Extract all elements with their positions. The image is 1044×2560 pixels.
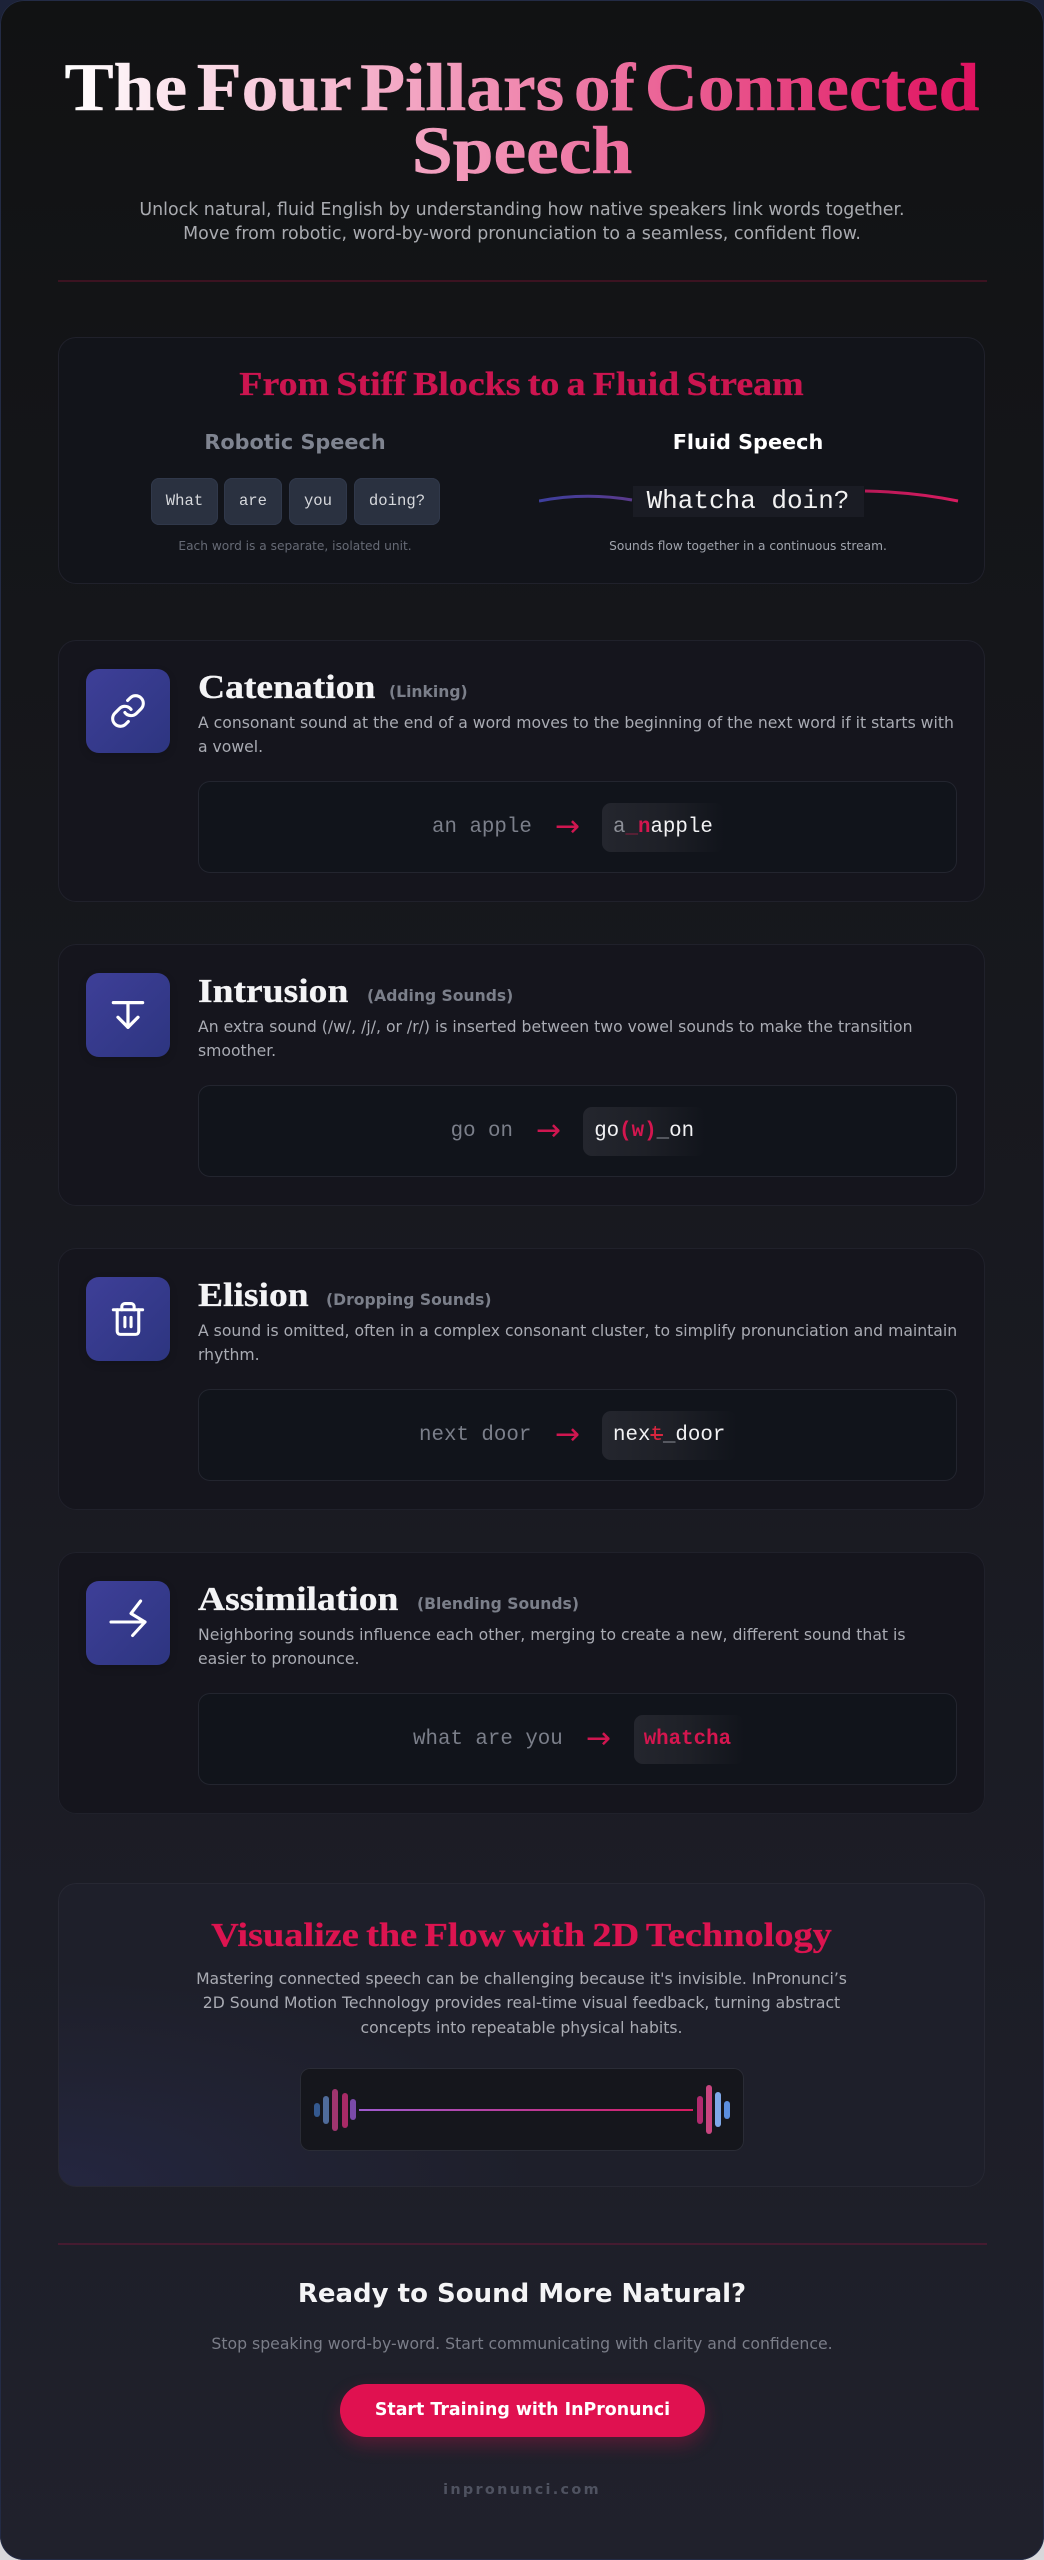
linked result: a_napple (613, 816, 713, 839)
original phrase: go on (451, 1120, 513, 1143)
example: what are you to whatcha (198, 1693, 957, 1785)
heading: fluid speech: Fluid Speech (673, 430, 823, 454)
card: catenation (58, 640, 985, 902)
arrow: → (555, 1417, 580, 1452)
description (198, 712, 954, 756)
description: smoother. (198, 1041, 276, 1060)
assimilation result: whatcha (644, 1728, 731, 1751)
heading: assimilation: Assimilation (198, 1581, 398, 1618)
word block: you: you (304, 492, 332, 510)
panel text: concepts into repeatable physical habits. (361, 2018, 682, 2037)
elision result (602, 1411, 737, 1460)
intrusion result: go(w)_on (594, 1120, 694, 1143)
connecting flow line (359, 2109, 693, 2111)
panel text: Mastering connected speech can be challenging because it's invisible. InPronunci’s (196, 1969, 847, 1988)
assimilation result (634, 1715, 744, 1764)
call to action text: Stop speaking word-by-word. Start communicating with clarity and confidence. (211, 2334, 833, 2353)
description (198, 1320, 957, 1364)
heading: elision: Elision (198, 1277, 309, 1314)
description: easier to pronounce. (198, 1649, 360, 1668)
panel heading: Visualize the Flow with 2D Technology (211, 1917, 832, 1954)
description (198, 1016, 913, 1060)
word block: are (224, 478, 282, 525)
description (198, 1624, 906, 1668)
panel text: 2D Sound Motion Technology provides real-time visual feedback, turning abstract (203, 1993, 840, 2012)
caption: robotic: Each word is a separate, isolated unit. (178, 539, 412, 553)
card: assimilation (58, 1552, 985, 1814)
subtitle (139, 200, 905, 244)
arrow: → (586, 1721, 611, 1756)
description: A sound is omitted, often in a complex consonant cluster, to simplify pronunciation and maintain (198, 1320, 957, 1340)
intrusion result (583, 1107, 705, 1156)
example: an apple to a_napple (198, 781, 957, 873)
title: Speech (412, 112, 632, 188)
title (1, 56, 1043, 181)
example: go on to go(w)_on (198, 1085, 957, 1177)
panel: 2D technology (58, 1883, 985, 2187)
icon: blended arrow (86, 1581, 170, 1665)
panel text (196, 1969, 847, 2037)
website: inpronunci.com (443, 2482, 601, 2498)
tag: dropping sounds: (Dropping Sounds) (326, 1291, 492, 1309)
tag: adding sounds: (Adding Sounds) (367, 987, 513, 1005)
elision result: next_door (613, 1424, 725, 1447)
icon: link (86, 669, 170, 753)
original phrase: what are you (413, 1728, 563, 1751)
panel heading: From Stiff Blocks to a Fluid Stream (239, 366, 804, 403)
arrow: → (555, 809, 580, 844)
panel: stiff blocks to fluid stream (58, 337, 985, 584)
description: a vowel. (198, 737, 263, 756)
word block: are: are (239, 492, 267, 510)
original phrase: an apple (432, 816, 532, 839)
original phrase: next door (419, 1424, 531, 1447)
description: Neighboring sounds influence each other, merging to create a new, different sound that is (198, 1624, 906, 1644)
description: A consonant sound at the end of a word moves to the beginning of the next word if it starts with (198, 712, 954, 732)
title: The Four Pillars of Connected (65, 49, 979, 125)
waveform bars: left (314, 2089, 356, 2131)
description: An extra sound (/w/, /j/, or /r/) is inserted between two vowel sounds to make the transition (198, 1016, 913, 1036)
card: intrusion (58, 944, 985, 1206)
fluid speech phrase: Whatcha doin? (647, 486, 849, 516)
flow wave lines (539, 490, 958, 502)
heading: intrusion: Intrusion (198, 973, 348, 1010)
tag: linking: (Linking) (389, 683, 468, 701)
sound motion visualization (300, 2068, 744, 2151)
word block: you (289, 478, 347, 525)
linked result (602, 803, 724, 852)
caption: fluid: Sounds flow together in a continuous stream. (609, 539, 887, 553)
example: next door to nex(t)_door (198, 1389, 957, 1481)
word block: doing?: doing? (369, 492, 425, 510)
button (340, 2384, 705, 2437)
arrow: → (536, 1113, 561, 1148)
description: rhythm. (198, 1345, 260, 1364)
button: Start Training with InPronunci (375, 2400, 670, 2420)
call to action heading: Ready to Sound More Natural? (298, 2279, 746, 2309)
subtitle: Move from robotic, word-by-word pronunciation to a seamless, confident flow. (183, 224, 861, 244)
icon: trash can (86, 1277, 170, 1361)
heading: catenation: Catenation (198, 669, 375, 706)
subtitle: Unlock natural, fluid English by understanding how native speakers link words together. (139, 200, 905, 220)
word block: What: What (166, 492, 203, 510)
word block: What (151, 478, 218, 525)
word block: doing? (354, 478, 440, 525)
tag: blending sounds: (Blending Sounds) (417, 1595, 579, 1613)
heading: robotic speech: Robotic Speech (204, 430, 386, 454)
card: elision (58, 1248, 985, 1510)
icon: arrow down from bar (86, 973, 170, 1057)
waveform bars: right (697, 2085, 730, 2134)
